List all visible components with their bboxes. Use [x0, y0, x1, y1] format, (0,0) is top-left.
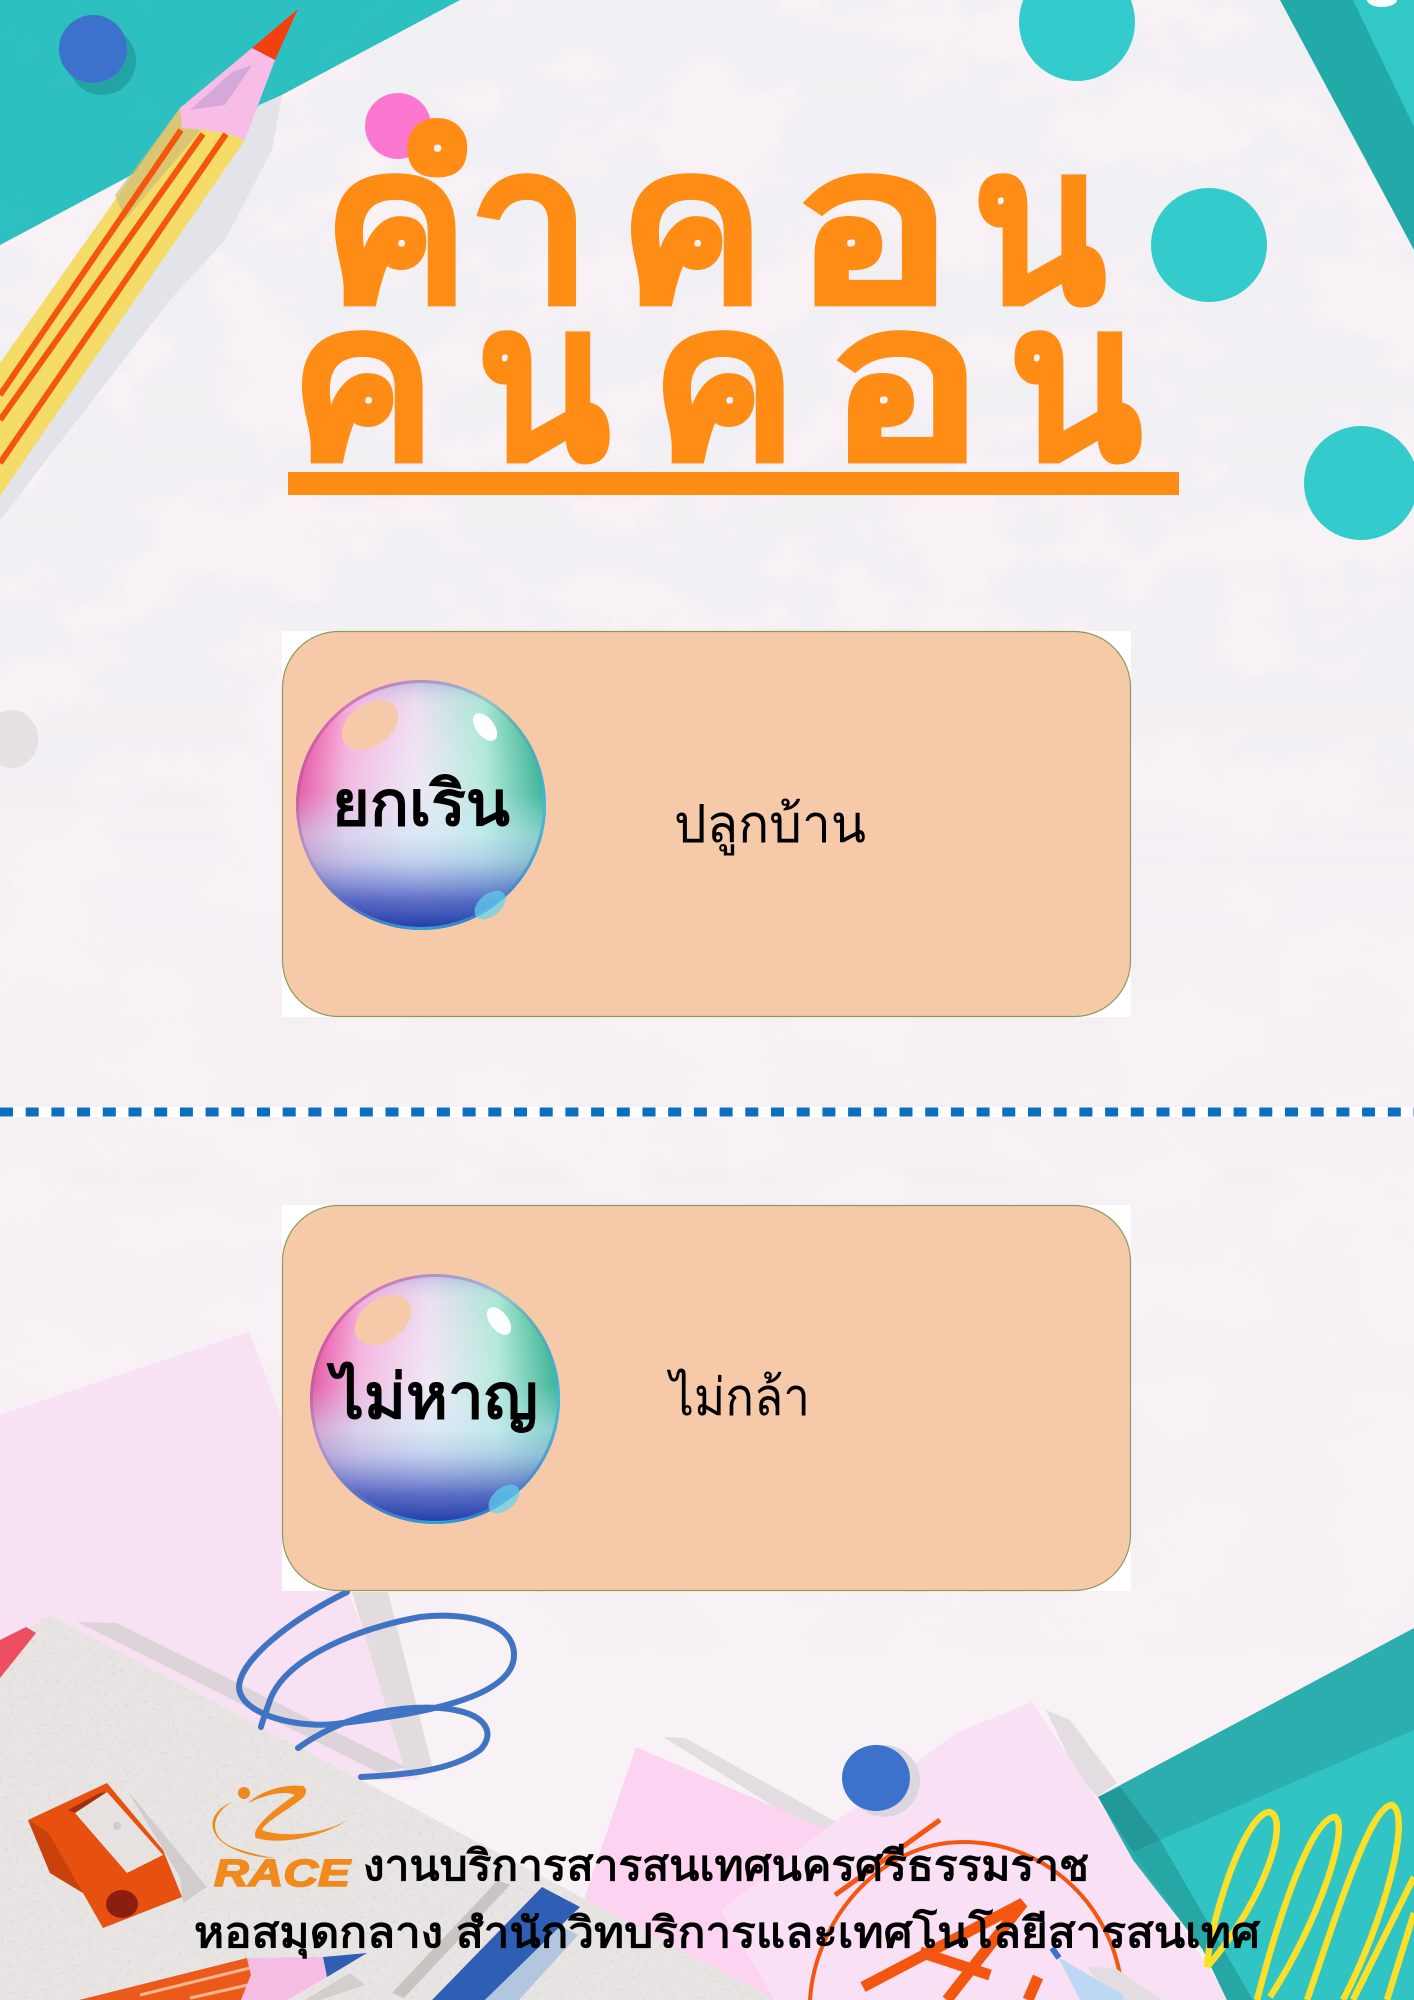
panel: pink paper scraps: [560, 1702, 1230, 2000]
icon: pencil top left: [0, 9, 298, 520]
icon: bubble: [310, 1274, 560, 1524]
icon: graded A circle: [810, 1820, 1122, 2000]
dot: teal lower: [1304, 426, 1414, 540]
logo: RACE: RACE: [214, 1853, 352, 1895]
dot: teal top: [1019, 0, 1135, 81]
panel: word 1: [282, 631, 1131, 1017]
title line 1: [323, 103, 1106, 348]
strip: pale blue shadow: [485, 1926, 578, 2000]
title line 1: อ: [792, 104, 953, 347]
icon: bubble: [296, 680, 546, 930]
meaning: ปลูกบ้าน: [674, 796, 866, 856]
panel: word 2: [282, 1205, 1131, 1591]
icon: blue pencil: [1052, 1948, 1163, 2000]
corner: top right teal paper: [1280, 0, 1414, 250]
title line 1: ค: [619, 105, 765, 348]
dot: top left blue: [59, 15, 136, 95]
title: [288, 103, 1179, 505]
title line 1: น: [973, 103, 1106, 347]
logo: RACE: [212, 1786, 352, 1895]
panel: bottom left pink sheet: [0, 1332, 420, 1780]
dot: pink: [365, 93, 431, 159]
corner: top left teal paper: [0, 0, 460, 245]
background texture: [220, 50, 1346, 264]
grey smudge left edge: [0, 710, 38, 768]
strip: blue paper: [432, 1887, 580, 2000]
title line 2: อ: [826, 262, 983, 505]
meaning: ไม่กล้า: [666, 1368, 810, 1427]
card white backing: [282, 1205, 1131, 1591]
card: [282, 1206, 1130, 1590]
card white backing: [282, 631, 1131, 1017]
title line 2: น: [477, 260, 610, 504]
divider: [0, 1107, 1414, 1117]
card: [282, 632, 1130, 1016]
footer text: [194, 1842, 1261, 1959]
icon: blue scribble: [239, 1592, 514, 1777]
footer line 1: งานบริการสารสนเทศนครศรีธรรมราช: [363, 1842, 1089, 1889]
title underline: [288, 472, 1179, 495]
panel: teal folder bottom right: [1098, 1628, 1414, 2000]
dialect word: ไม่หาญ: [326, 1361, 538, 1433]
panel: grey notebook: [0, 1615, 775, 2000]
title line 2: ค: [651, 262, 797, 505]
dot: blue bottom: [842, 1745, 920, 1817]
title line 1: คำ: [323, 105, 591, 348]
icon: pencil bottom: [79, 1953, 367, 2000]
dialect word: ยกเริน: [332, 770, 510, 839]
dot: teal middle: [1151, 188, 1267, 302]
title line 2: ค: [290, 262, 436, 505]
title line 2: [290, 260, 1142, 505]
title line 2: น: [1009, 260, 1142, 504]
icon: yellow scribble: [1207, 1805, 1414, 2000]
footer line 2: หอสมุดกลาง สำนักวิทบริการและเทศโนโลยีสารสนเทศ: [194, 1908, 1261, 1959]
strip: grey behind scribble: [352, 1592, 433, 1775]
icon: sharpener: [28, 1783, 207, 1928]
